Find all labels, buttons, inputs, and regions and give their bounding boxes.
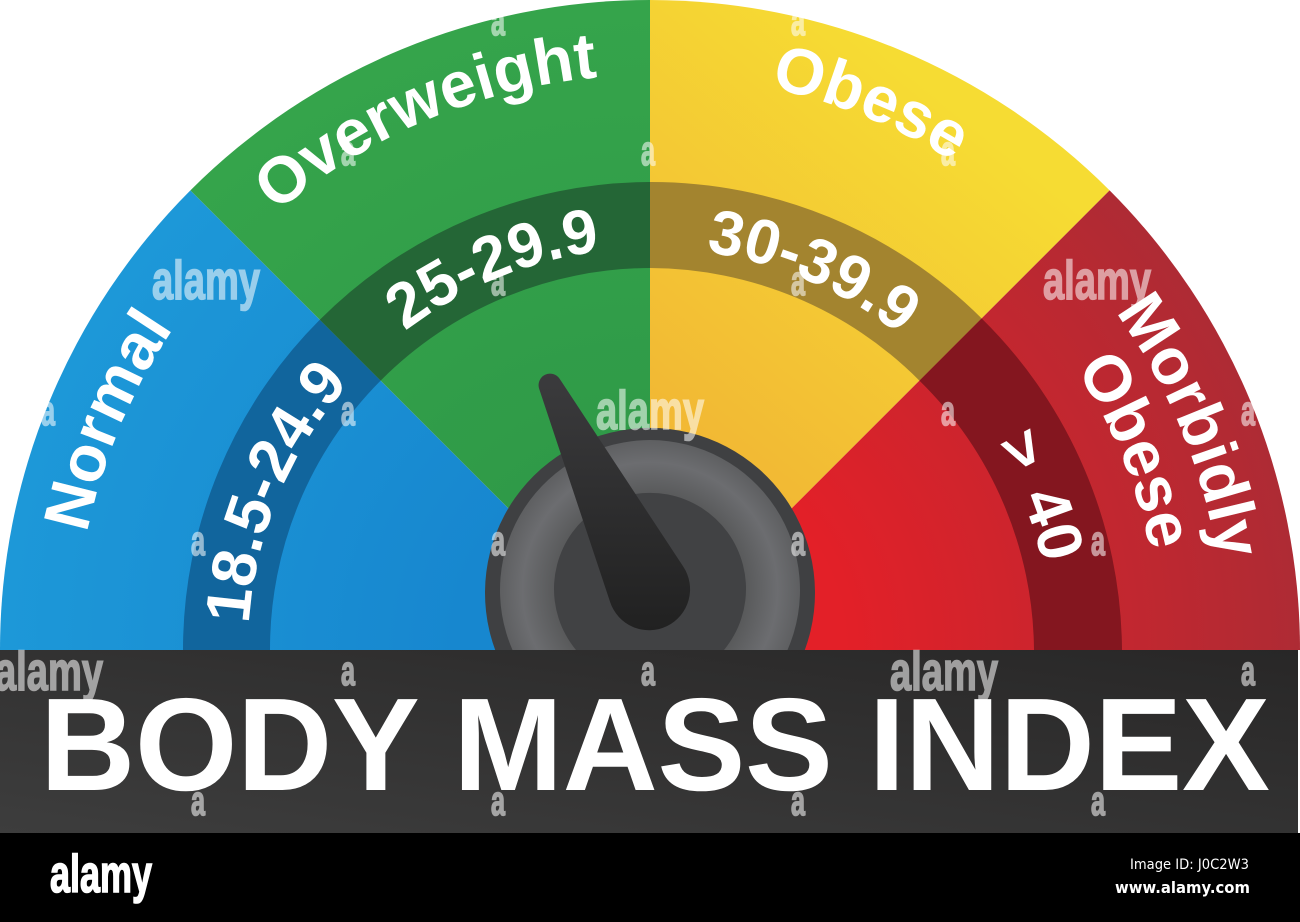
watermarks: a <box>491 517 505 564</box>
watermarks: alamy <box>596 379 704 441</box>
watermarks: a <box>41 387 55 434</box>
watermarks: a <box>341 127 355 174</box>
band segment: normal <box>183 320 381 650</box>
hub outer rim <box>485 428 815 650</box>
footer logo: alamy <box>50 845 152 904</box>
watermarks: alamy <box>890 640 998 702</box>
sector: obese (yellow) <box>650 0 1110 650</box>
band segment: overweight <box>320 182 650 381</box>
watermarks: a <box>641 647 655 694</box>
range: 25-29.9: 25-29.9 <box>386 210 596 330</box>
band segment: obese <box>650 182 982 381</box>
watermarks: a <box>791 777 805 824</box>
watermarks: a <box>791 257 805 304</box>
watermarks: alamy <box>152 249 260 311</box>
label: Normal: Normal <box>44 306 171 530</box>
watermarks: alamy <box>1043 249 1151 311</box>
band segment: morbidly obese <box>919 318 1122 650</box>
watermarks: a <box>341 647 355 694</box>
watermarks: a <box>191 517 205 564</box>
title: BODY MASS INDEX: BODY MASS INDEX <box>40 671 1270 818</box>
watermarks: a <box>191 777 205 824</box>
watermarks: a <box>341 387 355 434</box>
label: Obese (second line): Obese <box>1084 355 1182 546</box>
range: > 40: > 40 <box>1000 428 1082 558</box>
hub grey ring <box>500 440 800 650</box>
watermarks: a <box>941 387 955 434</box>
range: 18.5-24.9: 18.5-24.9 <box>207 363 342 620</box>
gauge: coloured semicircle <box>0 0 1300 650</box>
range: 30-39.9: 30-39.9 <box>709 211 918 328</box>
label: Obese: Obese <box>777 48 964 156</box>
needle <box>539 374 690 630</box>
sector: normal (blue) <box>0 190 650 650</box>
watermarks: a <box>641 127 655 174</box>
sector: overweight (green) <box>190 0 650 650</box>
category labels <box>44 36 1256 554</box>
watermarks: a <box>1091 517 1105 564</box>
hub inner disc <box>554 493 746 650</box>
watermarks: a <box>491 257 505 304</box>
watermarks: a <box>1091 777 1105 824</box>
watermarks: a <box>1241 387 1255 434</box>
dial hub <box>485 428 815 650</box>
footer strip <box>0 833 1300 922</box>
footer image id: Image ID: J0C2W3 <box>1130 857 1249 873</box>
label: Overweight: Overweight <box>258 36 597 203</box>
sector: morbidly obese (red) <box>650 190 1300 650</box>
title banner <box>0 650 1298 833</box>
label: Morbidly: Morbidly <box>1118 290 1256 554</box>
range band: darker ring <box>183 182 1122 650</box>
watermarks: a <box>791 517 805 564</box>
watermarks: a <box>1241 647 1255 694</box>
watermarks: a <box>491 777 505 824</box>
watermarks: a <box>941 127 955 174</box>
BMI ranges <box>207 210 1082 620</box>
footer url: www.alamy.com <box>1115 878 1250 897</box>
